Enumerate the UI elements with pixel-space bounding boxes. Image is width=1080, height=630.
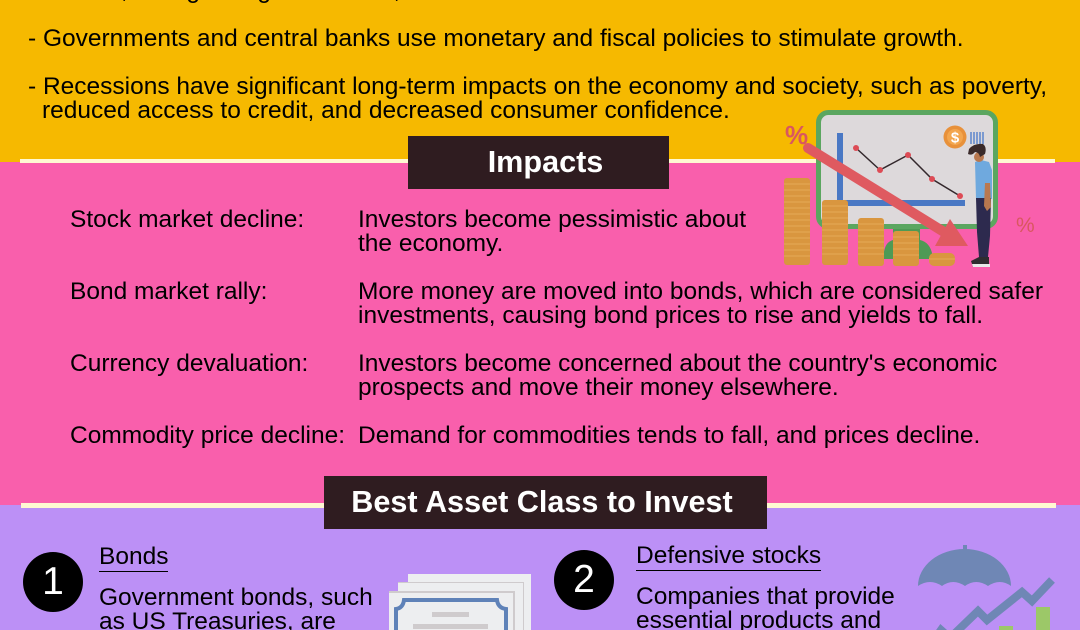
row: bond market rally: More money are moved into bonds, which are considered safer	[358, 278, 1043, 305]
text: cut-off bullet line	[42, 0, 400, 4]
heading: Impacts: Impacts	[488, 145, 603, 179]
icon: coin stacks	[784, 178, 955, 266]
badge: number 2	[554, 550, 614, 610]
chart axes	[840, 133, 965, 203]
badge: number 2: 2	[573, 558, 595, 601]
row: currency devaluation: Currency devaluation:	[70, 350, 308, 377]
row: currency devaluation: Investors become concerned about the country's economic	[358, 350, 997, 377]
text: bonds description: Government bonds, such	[99, 584, 373, 611]
badge: number 1	[23, 552, 83, 612]
icon: monitor screen	[818, 112, 996, 226]
panel: impacts band	[0, 162, 1080, 505]
badge: number 1: 1	[42, 560, 64, 603]
row: commodity price decline: Demand for commodities tends to fall, and prices decline.	[358, 422, 980, 449]
item 2: defensive stocks	[554, 542, 895, 630]
text: defensive stocks description	[636, 583, 895, 630]
text: long-term impacts bullet	[28, 73, 1047, 124]
row: bond market rally: investments, causing bond prices to rise and yields to fall.	[358, 302, 983, 329]
heading: Impacts	[408, 136, 669, 189]
heading: Best Asset Class to Invest: Best Asset Class to Invest	[351, 485, 733, 519]
text: long-term impacts bullet: - Recessions have significant long-term impacts on the economy and society, such as poverty,	[28, 73, 1047, 100]
icon: percent signs	[785, 120, 1035, 237]
icon: percent signs: %	[1016, 214, 1035, 237]
line chart	[856, 148, 960, 196]
row: stock market decline: Stock market decline:	[70, 206, 304, 233]
heading: Bonds: Bonds	[99, 543, 168, 570]
icon: bond certificates	[389, 574, 531, 630]
text: defensive stocks description: Companies that provide	[636, 583, 895, 610]
icon: dollar coin	[944, 126, 966, 148]
row: bond market rally: Bond market rally:	[70, 278, 267, 305]
heading: Best Asset Class to Invest	[324, 476, 767, 529]
icon: dollar coin: $	[951, 130, 960, 146]
icon: monitor stand	[883, 226, 933, 259]
icon: umbrella and rising chart	[918, 545, 1055, 630]
icon: sad man	[968, 144, 992, 267]
text: policy bullet: - Governments and central banks use monetary and fiscal policies to stimulate growth.	[28, 25, 964, 52]
row: commodity price decline	[70, 422, 980, 449]
icon: data bars	[971, 132, 983, 144]
row: stock market decline: Investors become pessimistic about	[358, 206, 746, 233]
row: commodity price decline: Commodity price decline:	[70, 422, 345, 449]
row: stock market decline	[70, 206, 746, 257]
heading: Defensive stocks: Defensive stocks	[636, 542, 821, 569]
text: long-term impacts bullet: reduced access to credit, and decreased consumer confidence.	[42, 97, 730, 124]
panel: overview band	[0, 0, 1080, 162]
row: currency devaluation: prospects and move their money elsewhere.	[358, 374, 839, 401]
row: stock market decline: the economy.	[358, 230, 503, 257]
text: bonds description	[99, 584, 373, 630]
item 1: bonds	[23, 543, 373, 630]
icon: percent signs: %	[785, 120, 808, 150]
row: bond market rally	[70, 278, 1043, 329]
row: currency devaluation	[70, 350, 997, 401]
icon: falling arrow	[808, 148, 968, 246]
